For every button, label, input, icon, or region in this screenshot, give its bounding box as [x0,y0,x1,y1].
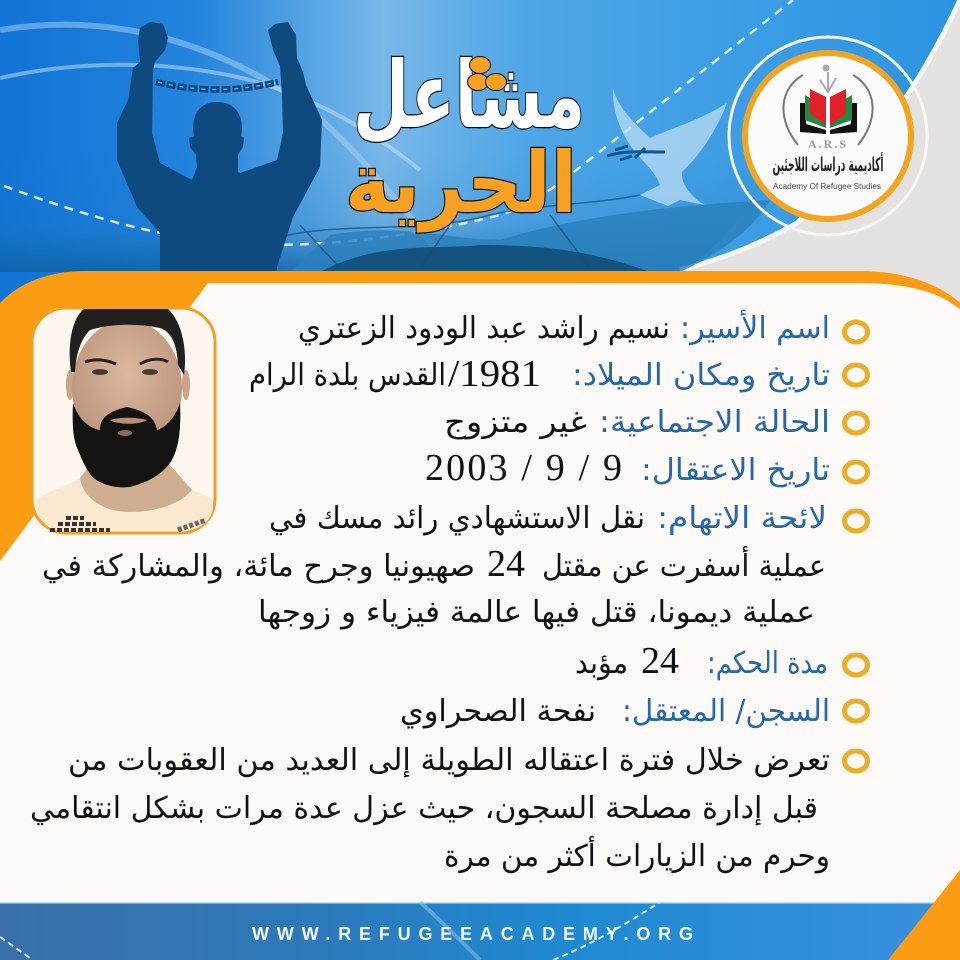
item: charges: عملية أسفرت عن مقتل [542,545,826,584]
item: prison: السجن/ المعتقل: [622,694,830,729]
item: sentence: 24 [641,640,679,682]
item: charges: لائحة الاتهام: [657,501,827,536]
light arcs [0,25,440,255]
item: arrest date: 2003 / 9 / 9 [425,447,622,489]
logo badge [729,37,927,235]
footer bar [0,870,960,960]
logo English name: Academy Of Refugee Studies [773,181,881,191]
icon: dove with olive branch [607,88,727,206]
title line 1: مشاعل [353,42,585,149]
logo disc with orange ring [745,53,911,219]
item: sentence: مدة الحكم: [707,646,828,681]
bullet list [30,308,868,874]
item: prison [400,694,868,729]
orange frame [0,271,960,590]
item: charges: 24 [487,543,525,585]
website address: WWW.REFUGEEACADEMY.ORG [252,924,693,944]
item: marital status [444,405,868,440]
logo outer white ring [729,37,927,235]
footer decorative dashes [0,902,660,960]
item: punishments: تعرض خلال فترة اعتقاله الطويلة إلى العديد من العقوبات من [68,743,830,778]
content panel [0,283,960,902]
item: charges: صهيونيا وجرح مائة، والمشاركة في [42,549,475,584]
item: punishments: وحرم من الزيارات أكثر من مرة [444,835,830,874]
portrait [32,308,215,533]
item: birth date and place: القدس بلدة الرام [249,358,446,393]
item: charges: نقل الاستشهادي رائد مسك في [269,501,645,536]
orange corner triangle [888,870,960,960]
title line 2: الحرية [345,134,577,233]
icon: prisoner silhouette with raised chained fists [117,22,322,272]
mouth [110,418,147,424]
ears [66,370,74,400]
item: arrest date: تاريخ الاعتقال: [641,453,830,488]
item: charges [42,501,868,630]
item: birth date and place: /1981 [448,353,541,395]
dark ground and barbed wire [290,200,770,272]
item: prisoner name [298,308,868,346]
item: punishments [30,743,868,874]
item: punishments: قبل إدارة مصلحة السجون، حيث عزل عدة مرات بشكل انتقامي [30,791,818,826]
title [345,42,585,233]
hair [70,309,185,375]
item: sentence: مؤبد [575,646,628,681]
banner white edge [680,0,960,270]
item: charges: عملية ديمونا، قتل فيها عالمة فيزياء و زوجها [258,595,815,630]
title orange dots [468,57,506,90]
chin patch [118,430,132,436]
grey corner behind banner [600,0,960,305]
item: prison: نفحة الصحراوي [400,694,596,729]
dashed lines [4,0,793,245]
eyes and brows [85,359,168,364]
item: prisoner name: اسم الأسير: [680,308,830,346]
item: arrest date [425,447,868,489]
blue banner background [0,0,960,305]
beard [73,403,180,487]
item: sentence [575,640,868,682]
item: birth date and place [249,353,868,395]
item: prisoner name: نسيم راشد عبد الودود الزعتري [298,311,670,346]
icon: open book logo [783,64,873,145]
neck [80,465,192,512]
item: birth date and place: تاريخ ومكان الميلاد: [572,358,830,393]
item: marital status: غير متزوج [444,405,587,440]
header banner [0,0,960,305]
keffiyeh pattern [50,518,110,530]
item: marital status: الحالة الاجتماعية: [599,405,830,440]
logo initials: A.R.S [808,137,848,151]
shirt [36,478,213,531]
face [72,320,182,456]
